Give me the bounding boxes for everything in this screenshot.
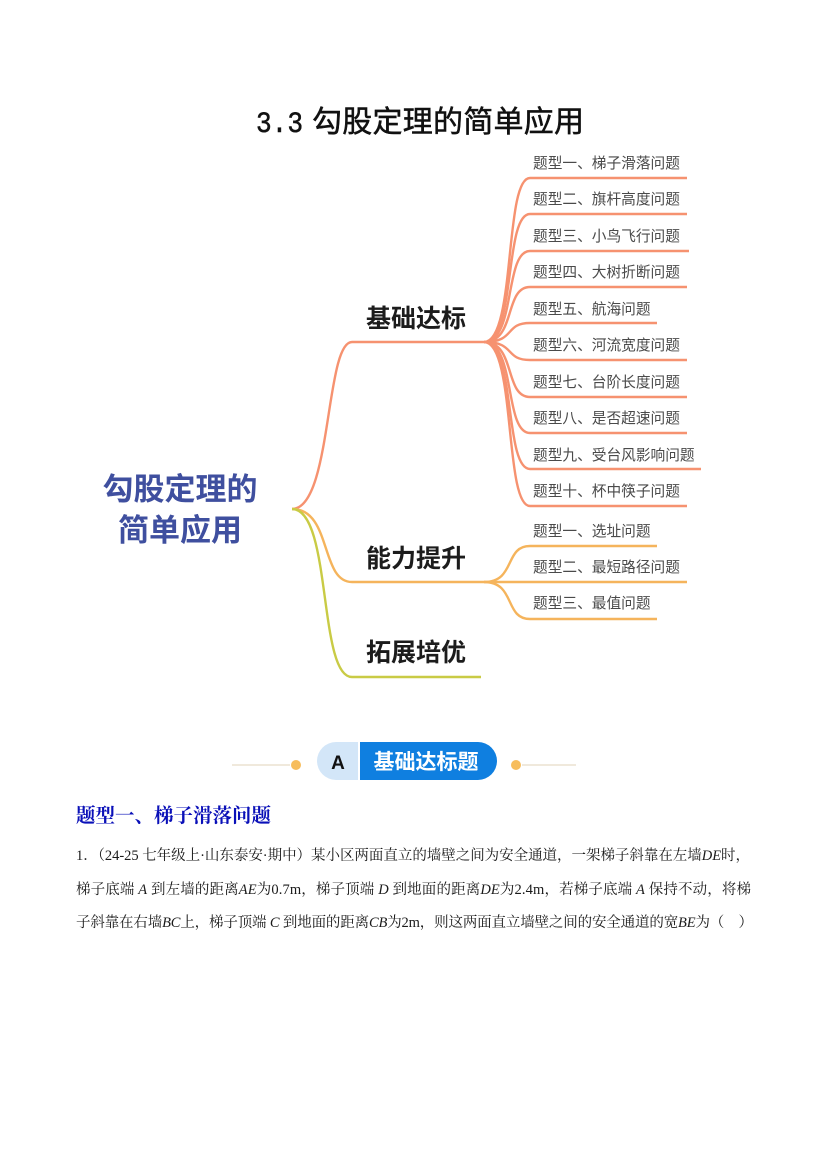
section heading: 题型一、梯子滑落问题 (76, 804, 272, 827)
title: 3.3 (256, 108, 303, 142)
leaf labels: 基础达标: 题型九、受台风影响问题 (533, 447, 695, 464)
mind map (102, 155, 701, 677)
leaf labels: 基础达标: 题型六、河流宽度问题 (533, 337, 680, 354)
question text: 梯子底端 A 到左墙的距离AE为0.7m，梯子顶端 D 到地面的距离DE为2.4m，若梯子底端 A 保持不动，将梯 (76, 880, 751, 898)
branch label: 拓展培优: 拓展培优 (366, 639, 466, 667)
banner blue tab (360, 742, 497, 780)
leaf labels: 能力提升: 题型二、最短路径问题 (533, 559, 680, 576)
leaf labels: 能力提升: 题型一、选址问题 (533, 523, 651, 540)
root node: 勾股定理的 (102, 472, 258, 507)
leaf labels: 基础达标: 题型二、旗杆高度问题 (533, 191, 680, 208)
question text: 1．（24-25 七年级上·山东泰安·期中）某小区两面直立的墙壁之间为安全通道，一架梯子斜靠在左墙DE时， (76, 846, 750, 864)
leaf labels: 基础达标: 题型八、是否超速问题 (533, 410, 680, 427)
leaf labels: 能力提升: 题型三、最值问题 (533, 595, 651, 612)
branch label: 基础达标: 基础达标 (366, 305, 466, 333)
leaf labels: 基础达标: 题型一、梯子滑落问题 (533, 155, 680, 172)
banner letter tab (317, 742, 358, 780)
icon: right dot (511, 760, 521, 770)
leaf labels: 基础达标 (533, 155, 695, 500)
branch label: 能力提升: 能力提升 (366, 545, 466, 573)
question text: 子斜靠在右墙BC上，梯子顶端 C 到地面的距离CB为2m，则这两面直立墙壁之间的安全通道的宽BE为（ ） (76, 913, 753, 931)
leaf labels: 基础达标: 题型四、大树折断问题 (533, 264, 680, 281)
leaf connectors: 能力提升 (484, 546, 687, 619)
leaf labels: 能力提升 (533, 523, 680, 612)
icon: left dot (291, 760, 301, 770)
leaf connectors: 基础达标 (484, 178, 701, 506)
root node (102, 472, 258, 548)
leaf labels: 基础达标: 题型七、台阶长度问题 (533, 374, 680, 391)
banner text: 基础达标题 (374, 751, 478, 774)
section banner (232, 742, 576, 780)
branch connectors from root (292, 342, 484, 677)
title: 勾股定理的简单应用 (312, 106, 584, 139)
leaf labels: 基础达标: 题型十、杯中筷子问题 (533, 483, 680, 500)
banner letter: A (331, 753, 345, 774)
question text (76, 846, 753, 931)
leaf labels: 基础达标: 题型三、小鸟飞行问题 (533, 228, 680, 245)
root node: 简单应用 (118, 513, 242, 548)
leaf labels: 基础达标: 题型五、航海问题 (533, 301, 651, 318)
